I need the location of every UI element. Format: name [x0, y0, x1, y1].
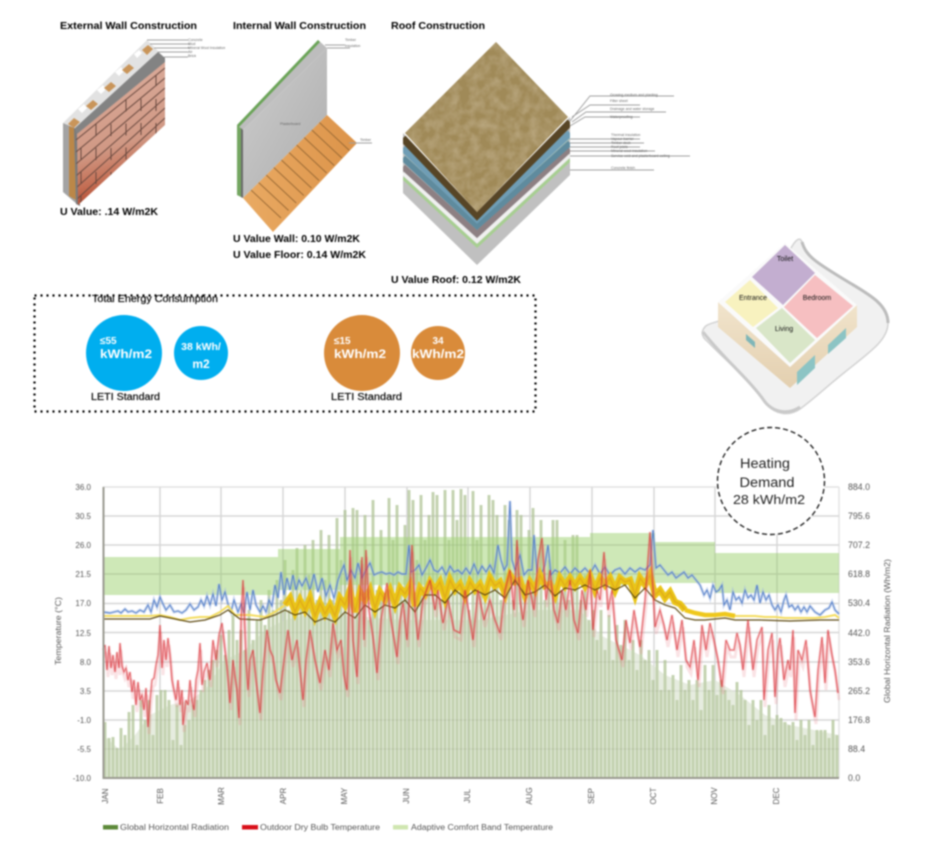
- month labels: JUN: [402, 788, 411, 804]
- month labels: MAY: [340, 787, 349, 804]
- left axis values: 30.5: [75, 512, 92, 521]
- wall component labels: Air: [188, 50, 193, 54]
- wall component labels: [188, 38, 225, 58]
- roof layer labels: Vapour barrier: [611, 137, 635, 141]
- illustration: green roof layered section: [403, 42, 690, 265]
- circle: blue LETI standard: kWh/m2: [100, 347, 152, 361]
- right axis values: 265.2: [848, 686, 870, 696]
- chart grid overlay: [103, 487, 839, 778]
- left axis values: 21.5: [75, 570, 92, 579]
- room labels: Bedroom: [803, 295, 831, 302]
- room: bedroom: [784, 275, 853, 338]
- callout: heating demand: 28 kWh/m2: [733, 493, 805, 507]
- right axis values: 530.4: [848, 598, 870, 608]
- series: outdoor dry bulb temperature: [103, 532, 839, 734]
- month labels: MAR: [217, 787, 226, 805]
- panel heading: Total Energy Consumption: [92, 294, 218, 305]
- month labels: SEP: [587, 788, 596, 804]
- circle: orange LETI standard: [324, 315, 400, 391]
- right axis values: 0.0: [848, 773, 860, 783]
- caption: left LETI standard: LETI Standard: [91, 392, 160, 403]
- chart axes: [103, 487, 839, 779]
- internal wall labels: Insulation: [345, 44, 360, 48]
- room labels: [739, 256, 831, 333]
- u-value: internal wall: U Value Wall: 0.10 W/m2K: [233, 234, 361, 245]
- left axis values: [73, 483, 92, 783]
- callout: heating demand: [718, 428, 824, 534]
- heading: internal wall construction: Internal Wall Construction: [233, 21, 366, 32]
- month labels: AUG: [525, 787, 534, 805]
- right axis values: 88.4: [848, 744, 865, 754]
- room: entrance: [725, 280, 778, 327]
- room labels: Entrance: [739, 295, 767, 302]
- room labels: Living: [775, 326, 793, 333]
- left axis values: -5.5: [77, 745, 92, 754]
- illustration: isometric house plan: [702, 239, 888, 414]
- circle: blue actual: 38 kWh/: [181, 341, 221, 353]
- month labels: NOV: [710, 787, 719, 805]
- internal wall labels: Plasterboard: [280, 122, 300, 126]
- circle: blue LETI standard: ≤55: [100, 336, 117, 347]
- left axis values: 8.0: [80, 658, 92, 667]
- right axis values: 884.0: [848, 482, 870, 492]
- roof layer labels: Mineral wool insulation: [611, 149, 647, 153]
- wall component labels: Concrete: [188, 38, 203, 42]
- legend: Outdoor Dry Bulb Temperature: [260, 823, 381, 832]
- circle: blue actual: [174, 326, 228, 380]
- roof layer labels: Thermal insulation: [611, 133, 640, 137]
- wall component labels: Mineral Wool Insulation: [188, 46, 225, 50]
- right axis values: [848, 482, 870, 783]
- chart: annual temperature and radiation: [54, 482, 892, 832]
- right axis values: 795.6: [848, 511, 870, 521]
- roof layer labels: Waterproofing: [610, 115, 632, 119]
- u-value: floor: U Value Floor: 0.14 W/m2K: [233, 250, 367, 261]
- month labels: JUL: [463, 788, 472, 803]
- roof layer labels: Service void and plasterboard ceiling: [611, 154, 670, 158]
- left axis values: 36.0: [75, 483, 92, 492]
- chart grid: [103, 487, 839, 778]
- legend: Global Horizontal Radiation: [120, 823, 229, 832]
- heading: roof construction: Roof Construction: [391, 21, 485, 32]
- roof layer labels: Drainage and water storage: [610, 107, 654, 111]
- left axis values: -10.0: [73, 774, 92, 783]
- left axis values: 3.5: [80, 687, 92, 696]
- series: indoor yellow temperature: [103, 575, 839, 622]
- roof layer labels: Filter sheet: [610, 99, 628, 103]
- illustration: internal wall and timber floor section: [237, 38, 372, 232]
- roof layer labels: Timber deck: [611, 141, 631, 145]
- month labels: FEB: [156, 788, 165, 804]
- internal wall labels: Timber: [360, 138, 372, 142]
- month labels: APR: [279, 788, 288, 804]
- u-value: external wall: U Value: .14 W/m2K: [60, 207, 159, 218]
- left axis values: -1.0: [77, 716, 92, 725]
- month labels: JAN: [101, 788, 110, 804]
- series: indoor blue temperature: [103, 501, 839, 615]
- left axis title: Temperature (°C): [54, 597, 63, 665]
- internal wall labels: [280, 38, 372, 142]
- right axis values: 176.8: [848, 715, 870, 725]
- roof layer labels: [610, 93, 670, 170]
- internal wall labels: Timber: [345, 38, 357, 42]
- right axis title: Global Horizontal Radiation (Wh/m2): [883, 559, 892, 703]
- illustration: external brick wall section: [63, 38, 225, 208]
- room: living: [756, 308, 815, 363]
- u-value: roof: U Value Roof: 0.12 W/m2K: [391, 275, 522, 286]
- legend: Adaptive Comfort Band Temperature: [411, 823, 554, 832]
- series: adaptive comfort band: [103, 533, 839, 595]
- series: global horizontal radiation: [103, 489, 838, 778]
- circle: orange LETI standard: ≤15: [334, 336, 351, 347]
- right axis values: 442.0: [848, 628, 870, 638]
- roof layer labels: Growing medium and planting: [610, 93, 658, 97]
- circle: orange actual: [411, 326, 465, 380]
- left axis values: 12.5: [75, 629, 92, 638]
- room labels: Toilet: [777, 256, 793, 263]
- right axis values: 353.6: [848, 657, 870, 667]
- room: toilet: [752, 245, 815, 305]
- roof layer labels: Roof joists: [611, 145, 628, 149]
- left axis values: 26.0: [75, 541, 92, 550]
- legend: [103, 823, 554, 832]
- wall component labels: Stud: [188, 42, 195, 46]
- callout: heating demand: Demand: [740, 475, 794, 490]
- wall component labels: Brick: [188, 54, 196, 58]
- panel: total energy consumption: [34, 294, 536, 412]
- month labels: [101, 787, 781, 805]
- circle: orange LETI standard: kWh/m2: [334, 347, 386, 361]
- right axis values: 707.2: [848, 540, 870, 550]
- right axis values: 618.8: [848, 569, 870, 579]
- circle: orange actual: 34: [432, 336, 444, 347]
- caption: right LETI standard: LETI Standard: [331, 392, 402, 403]
- circle: orange actual: kWh/m2: [412, 347, 464, 361]
- heading: external wall construction: External Wall Construction: [60, 21, 197, 32]
- left axis values: 17.0: [75, 599, 92, 608]
- circle: blue actual: m2: [192, 357, 210, 371]
- callout: heating demand: Heating: [740, 456, 790, 471]
- month labels: DEC: [772, 787, 781, 804]
- month labels: OCT: [649, 787, 658, 804]
- circle: blue LETI standard: [86, 315, 162, 391]
- roof layer labels: Concrete finish: [611, 166, 635, 170]
